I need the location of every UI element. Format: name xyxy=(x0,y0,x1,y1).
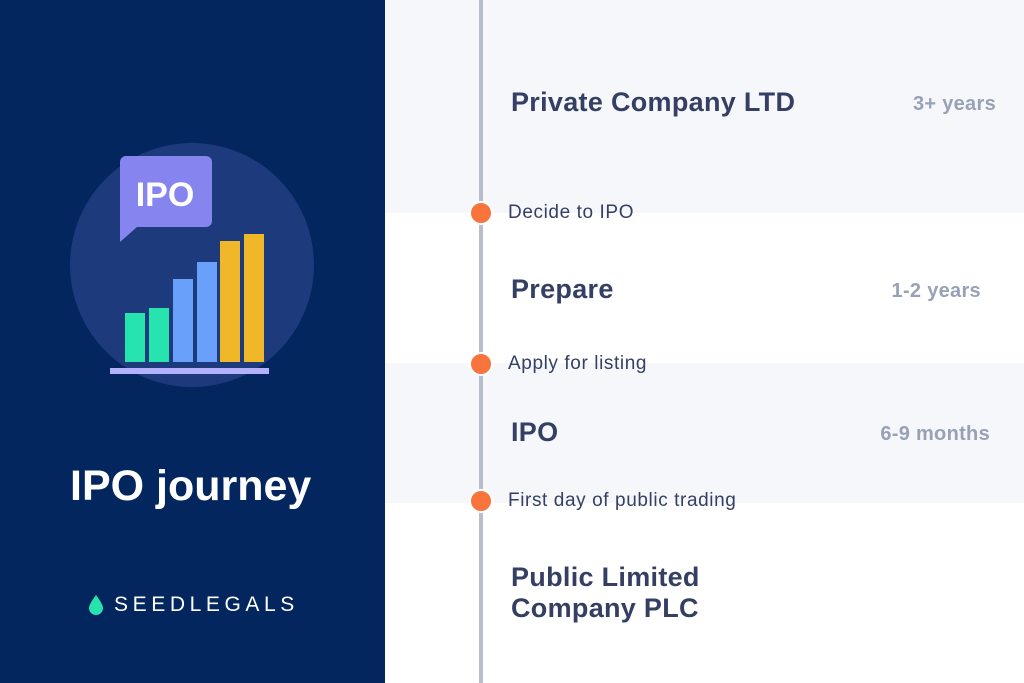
stage: Prepare: 1-2 years xyxy=(892,280,981,302)
timeline line xyxy=(479,0,483,683)
icon: IPO chart illustration: IPO xyxy=(136,176,194,214)
stage: Prepare: Prepare xyxy=(511,274,614,304)
left panel xyxy=(0,0,385,683)
stage: Public Limited Company PLC: Public Limited xyxy=(511,562,700,592)
stage: IPO xyxy=(511,417,990,447)
milestone: Apply for listing: Apply for listing xyxy=(508,353,647,374)
icon: IPO chart illustration xyxy=(70,143,314,387)
milestone: Decide to IPO xyxy=(469,201,634,225)
milestone: Apply for listing xyxy=(469,352,647,376)
stage: Public Limited Company PLC: Company PLC xyxy=(511,593,699,623)
stage: Private Company LTD: 3+ years xyxy=(913,93,996,115)
stage: Private Company LTD: Private Company LTD xyxy=(511,87,795,117)
milestone: First day of public trading: First day of public trading xyxy=(508,490,736,511)
stage: Public Limited Company PLC xyxy=(511,562,700,623)
stage: IPO: 6-9 months xyxy=(880,423,990,445)
stage: Private Company LTD xyxy=(511,87,996,117)
milestone: Decide to IPO: Decide to IPO xyxy=(508,202,634,223)
stage: Prepare xyxy=(511,274,981,304)
title: IPO journey xyxy=(70,462,311,510)
stage: IPO: IPO xyxy=(511,417,558,447)
row backgrounds xyxy=(385,0,1024,213)
logo: SeedLegals: SEEDLEGALS xyxy=(114,593,299,616)
